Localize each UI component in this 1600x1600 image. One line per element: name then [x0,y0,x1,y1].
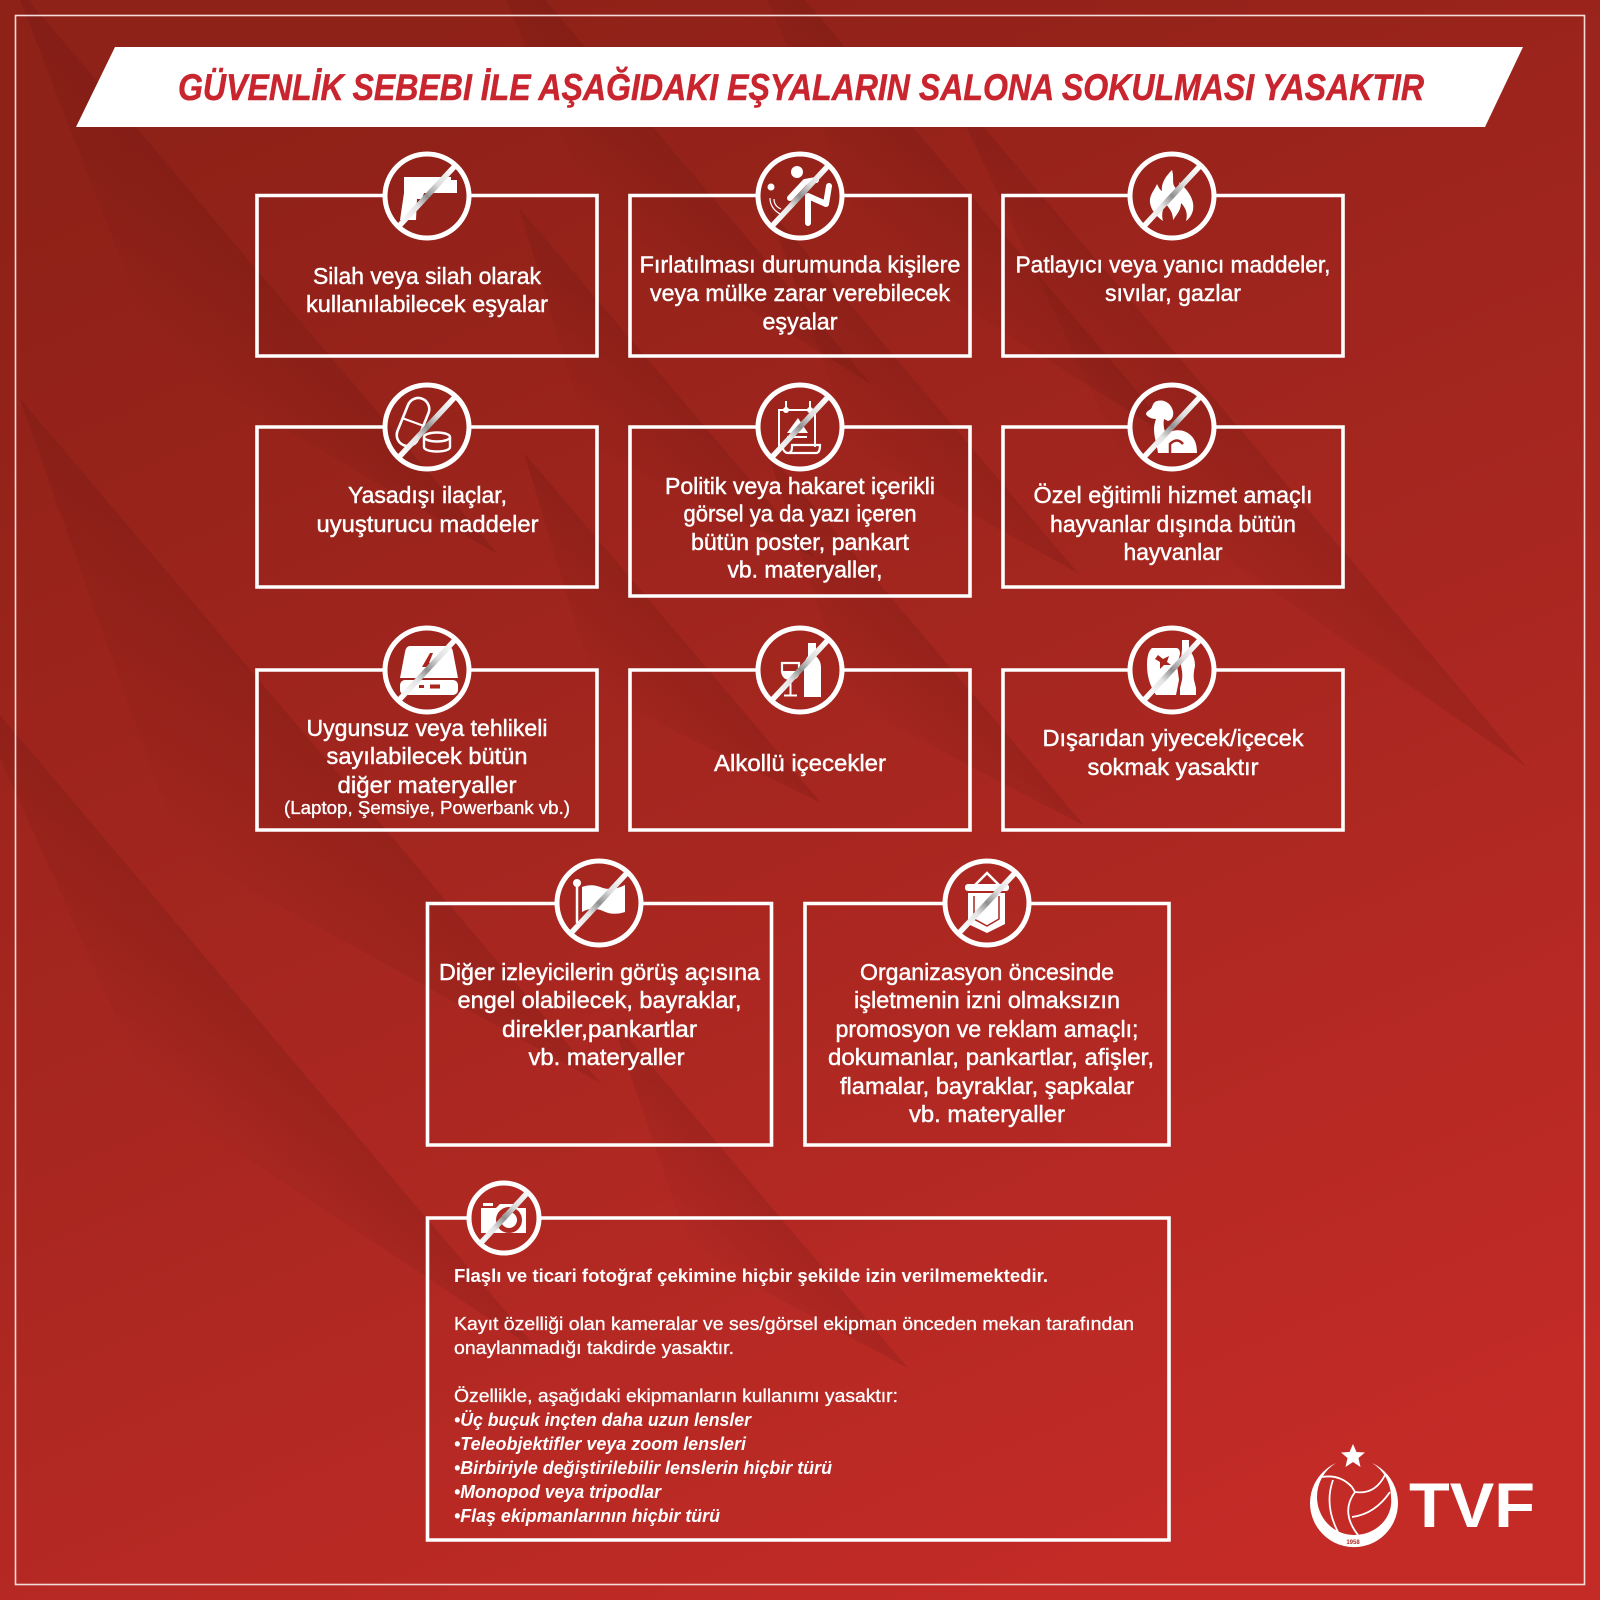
icon: prohibited dog [1130,385,1214,469]
icon: prohibited kicker [758,154,842,238]
text: dangerous materials [284,715,570,818]
text: promotional materials: promosyon ve reklam amaçlı; [836,1016,1138,1042]
icon: prohibited camera [469,1183,539,1253]
text: explosives: Patlayıcı veya yanıcı maddeler, [1016,252,1330,278]
text: flags and poles: Diğer izleyicilerin görüş açısına [439,959,760,985]
list: banned equipment: •Birbiriyle değiştirilebilir lenslerin hiçbir türü [454,1458,832,1478]
panel: animals [1003,385,1343,587]
text: promotional materials: Organizasyon öncesinde [860,959,1114,985]
text: photography rule [454,1265,1134,1406]
text: outside food and drink: Dışarıdan yiyecek/içecek [1042,725,1304,751]
text: weapons [306,263,548,317]
text: animals [1034,482,1312,565]
list: banned equipment: •Teleobjektifler veya zoom lensleri [454,1434,747,1454]
text: throwable items [640,252,960,334]
title text: GÜVENLİK SEBEBI İLE AŞAĞIDAKI EŞYALARIN SALONA SOKULMASI YASAKTIR [178,66,1424,108]
text: dangerous materials: (Laptop, Şemsiye, Powerbank vb.) [284,797,570,818]
text: outside food and drink: sokmak yasaktır [1088,754,1259,780]
text: weapons: kullanılabilecek eşyalar [306,291,548,317]
text: flags and poles: vb. materyaller [528,1044,685,1070]
icon: prohibited wine and bottle [758,628,842,712]
panel: outside food and drink [1003,628,1343,830]
text: photography rule: onaylanmadığı takdirde yasaktır. [454,1337,734,1358]
text: flags and poles [439,959,760,1070]
icon: prohibited gun [385,154,469,238]
text: promotional materials: işletmenin izni olmaksızın [854,987,1120,1013]
text: throwable items: Fırlatılması durumunda kişilere [640,252,960,278]
text: alcohol: Alkollü içecekler [714,750,886,776]
logo volleyball lines [1322,1475,1390,1535]
text: animals: Özel eğitimli hizmet amaçlı [1034,482,1312,508]
logo crescent [1310,1463,1398,1547]
logo star [1341,1444,1365,1467]
text: political posters: Politik veya hakaret içerikli [665,473,935,499]
text: throwable items: veya mülke zarar verebilecek [650,280,951,306]
text: outside food and drink [1042,725,1304,780]
panel: weapons [257,154,597,356]
text: political posters: bütün poster, pankart [691,529,910,555]
text: promotional materials: dokumanlar, pankartlar, afişler, [828,1044,1154,1070]
text: flags and poles: engel olabilecek, bayraklar, [458,987,742,1013]
icon: prohibited poster [758,385,842,469]
text: photography rule: Kayıt özelliği olan kameralar ve ses/görsel ekipman önceden mekan tarafından [454,1313,1134,1334]
list: banned equipment: •Flaş ekipmanlarının hiçbir türü [454,1506,720,1526]
panel: illegal drugs [257,385,597,587]
panel: alcohol [630,628,970,830]
text: animals: hayvanlar dışında bütün [1050,511,1296,537]
text: photography rule: Özellikle, aşağıdaki ekipmanların kullanımı yasaktır: [454,1385,898,1406]
text: explosives: sıvılar, gazlar [1105,280,1241,306]
text: dangerous materials: sayılabilecek bütün [326,743,528,769]
logo: TVF [1310,1444,1535,1547]
text: photography rule: Flaşlı ve ticari fotoğraf çekimine hiçbir şekilde izin verilmemektedir. [454,1265,1048,1286]
panel: flags and poles [428,861,772,1145]
list: banned equipment [454,1410,832,1526]
icon: prohibited flag [557,861,641,945]
icon: prohibited flame [1130,154,1214,238]
panel: promotional materials [805,861,1169,1145]
logo wordmark: TVF [1409,1471,1535,1541]
icon: prohibited pennant [945,861,1029,945]
panel: explosives [1003,154,1343,356]
text: animals: hayvanlar [1124,539,1223,565]
list: banned equipment: •Üç buçuk inçten daha uzun lensler [454,1410,752,1430]
text: weapons: Silah veya silah olarak [313,263,541,289]
text: political posters: görsel ya da yazı içeren [684,500,916,526]
text: explosives [1016,252,1330,306]
list: banned equipment: •Monopod veya tripodlar [454,1482,662,1502]
text: illegal drugs [316,482,539,537]
text: dangerous materials: Uygunsuz veya tehlikeli [306,715,548,741]
text: illegal drugs: uyuşturucu maddeler [316,511,539,537]
logo year: 1958 [1346,1540,1360,1546]
panel: throwable items [630,154,970,356]
text: political posters [665,473,935,582]
icon: prohibited powerbank [385,628,469,712]
text: political posters: vb. materyaller, [728,556,882,582]
text: flags and poles: direkler,pankartlar [502,1016,697,1042]
panel: photo and recording rules [428,1183,1169,1540]
text: promotional materials: vb. materyaller [909,1101,1065,1127]
text: promotional materials: flamalar, bayraklar, şapkalar [840,1073,1134,1099]
icon: prohibited pills [385,385,469,469]
text: throwable items: eşyalar [762,308,838,334]
text: dangerous materials: diğer materyaller [338,772,517,798]
panel: political posters [630,385,970,596]
text: illegal drugs: Yasadışı ilaçlar, [348,482,507,508]
panel: dangerous materials [257,628,597,830]
text: promotional materials [828,959,1154,1127]
icon: prohibited food and bottle [1130,628,1214,712]
title banner [76,47,1523,127]
